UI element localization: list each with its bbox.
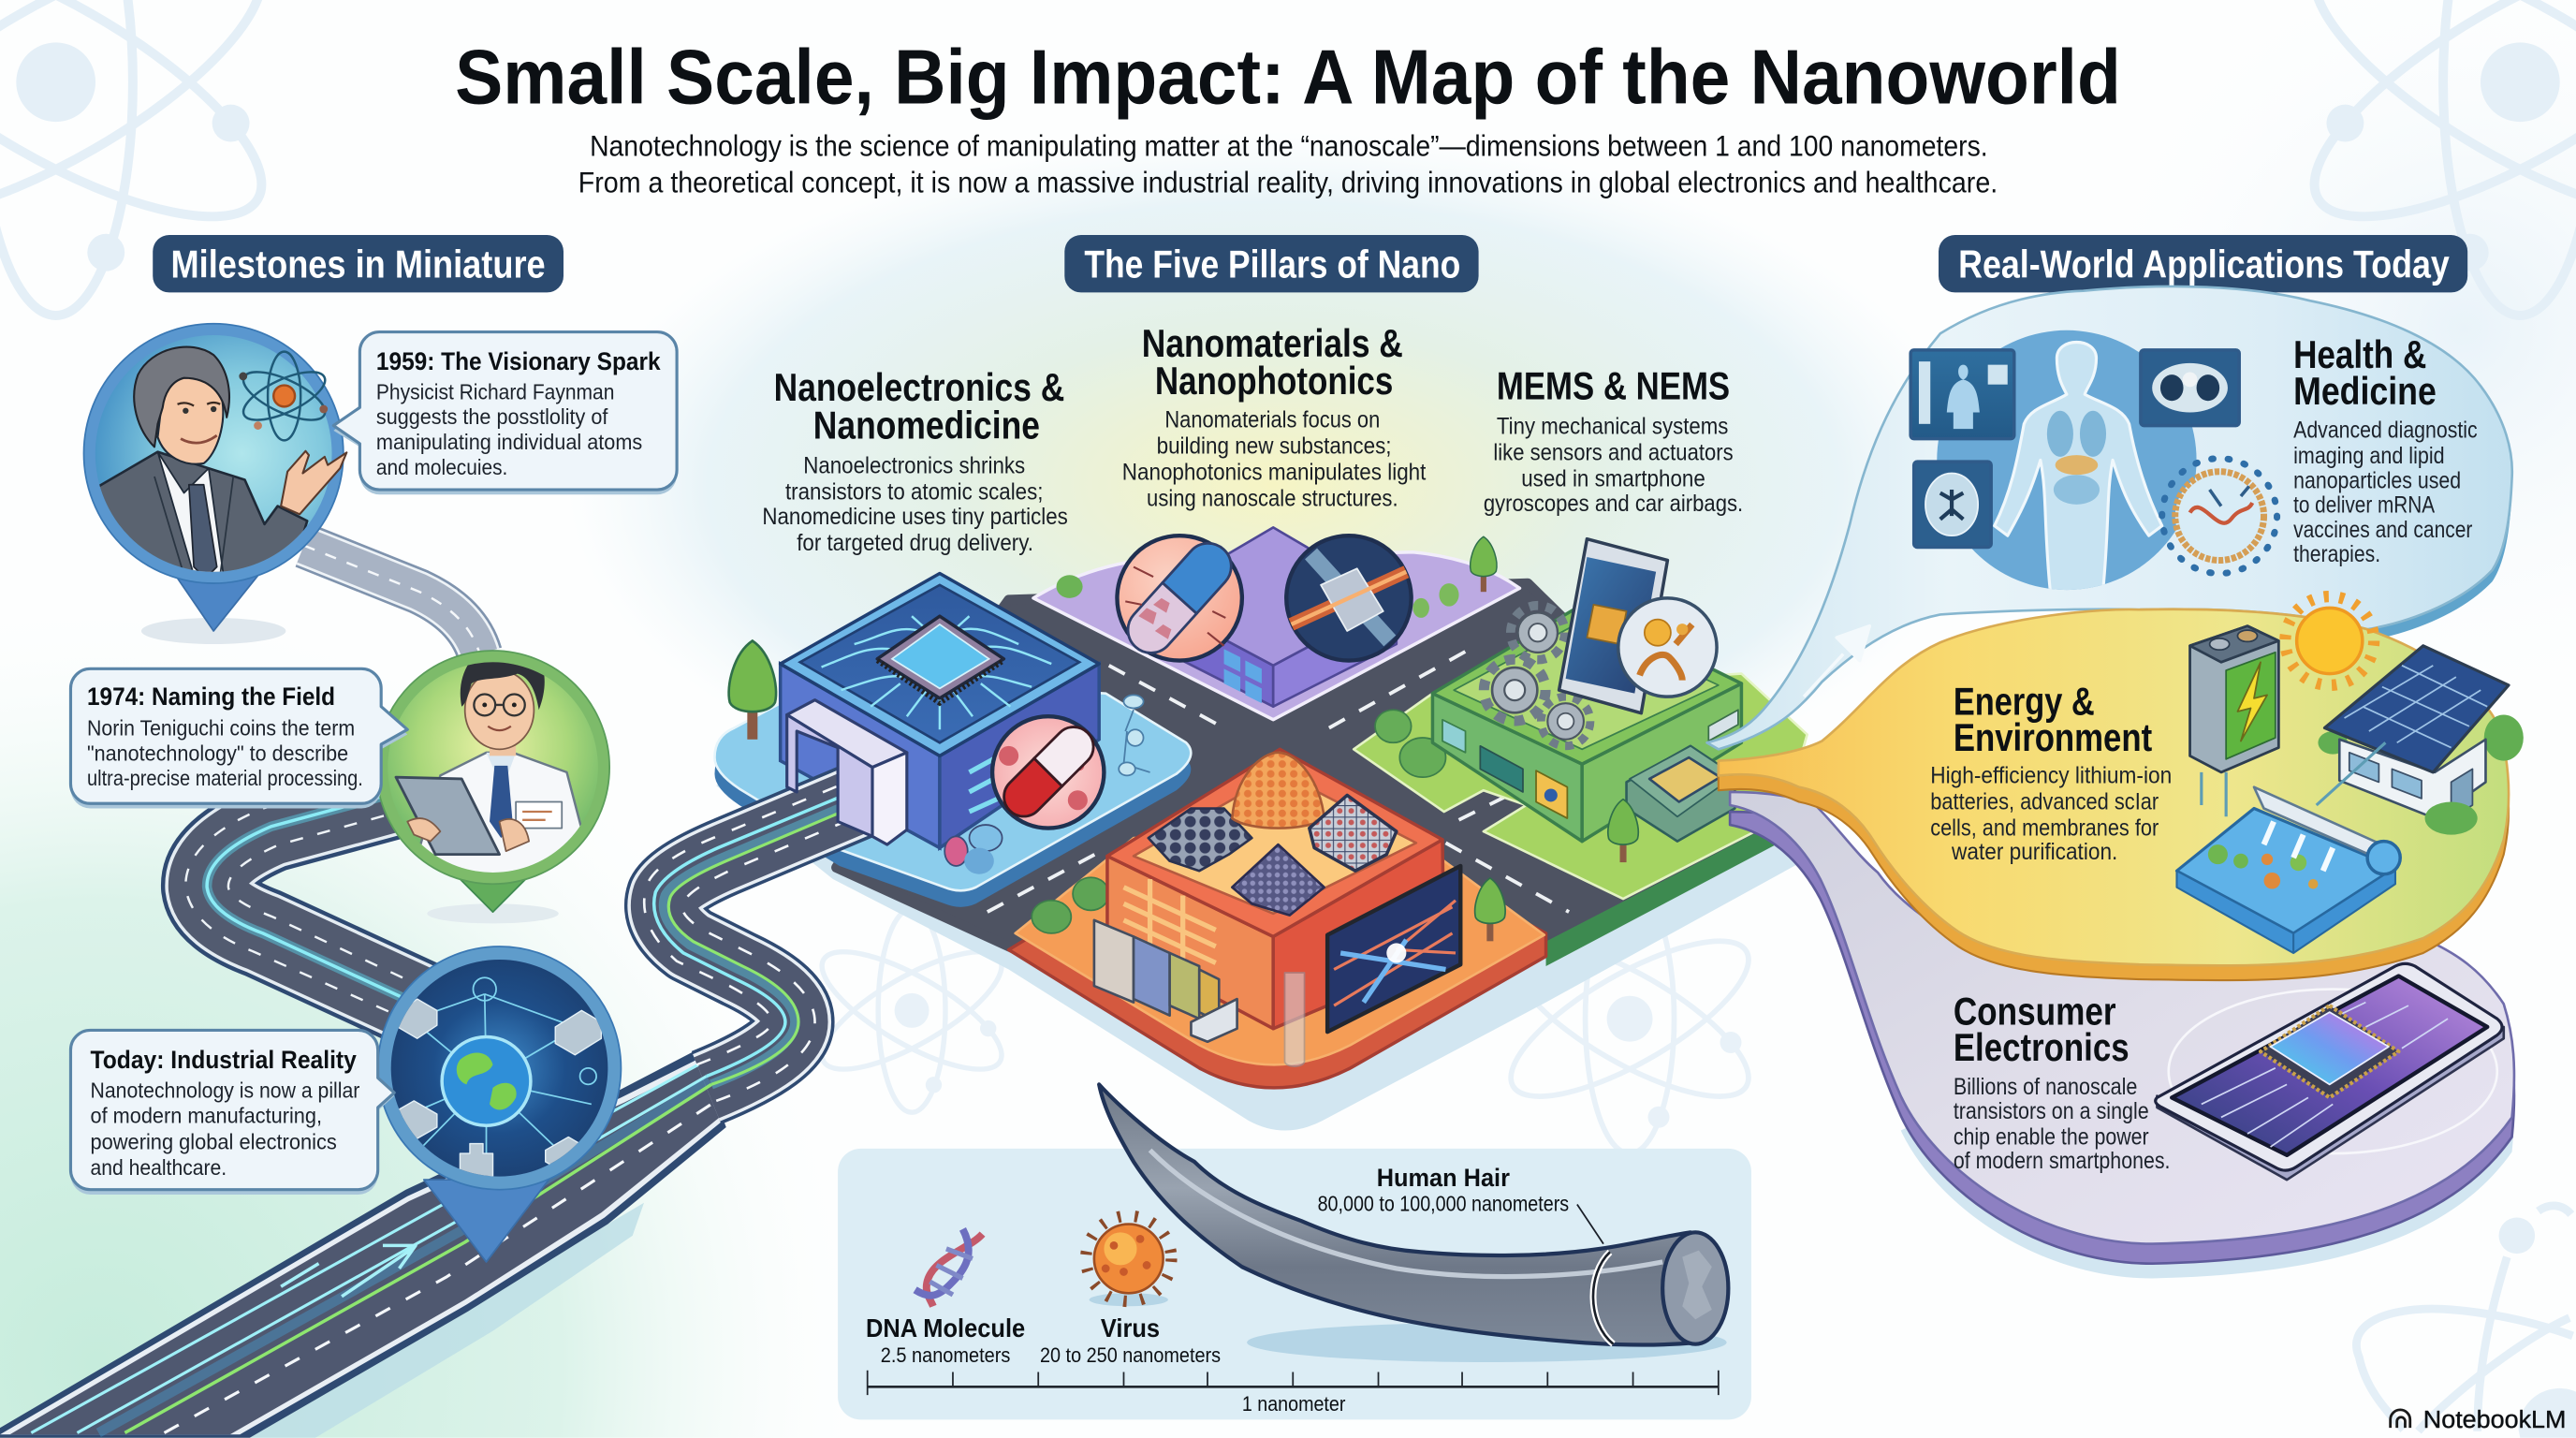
human body — [1995, 343, 2162, 592]
scale axis — [868, 1371, 1719, 1416]
road segment to pin two — [304, 546, 479, 654]
consumer electronics text: transistors on a single — [1954, 1099, 2149, 1124]
building: nanomaterials and nanophotonics — [1057, 527, 1497, 707]
plot: orange — [1009, 788, 1546, 1088]
roadway — [0, 286, 2566, 1438]
section heading: pillars: The Five Pillars of Nano — [1084, 242, 1460, 286]
consumer electronics text: Consumer — [1954, 989, 2116, 1033]
milestone pin: today — [378, 946, 621, 1262]
plot: green — [1354, 674, 1808, 966]
dome sample — [1232, 753, 1325, 829]
phone — [1559, 539, 1667, 713]
milestone card: today: powering global electronics — [91, 1130, 337, 1154]
bushes and tree — [1057, 536, 1497, 618]
pillar text: mems: Tiny mechanical systems — [1497, 414, 1728, 439]
virus label: 20 to 250 nanometers — [1040, 1343, 1221, 1367]
human hair label: 80,000 to 100,000 nanometers — [1318, 1192, 1569, 1216]
human hair label: Human Hair — [1377, 1163, 1510, 1192]
consumer electronics text — [1954, 989, 2170, 1174]
human hair label — [1318, 1163, 1569, 1216]
lipid nanoparticle — [2162, 459, 2277, 574]
milestone pin: 1974 — [376, 640, 609, 923]
pillar text: mems: gyroscopes and car airbags. — [1484, 492, 1743, 517]
energy text: batteries, advanced scIar — [1930, 789, 2159, 814]
milestone card: 1959: suggests the posstlolity of — [376, 404, 608, 429]
airbag icon — [1618, 598, 1717, 697]
application: consumer electronics — [1730, 792, 2514, 1278]
health text: imaging and lipid — [2293, 444, 2445, 469]
hand — [281, 451, 346, 514]
gate frame — [787, 700, 907, 844]
NotebookLM logo: NotebookLM — [2423, 1405, 2566, 1433]
main road to the pillars — [0, 772, 884, 1438]
energy text: Energy & — [1954, 679, 2095, 723]
gears — [1484, 606, 1590, 746]
scale panel — [838, 1084, 1751, 1419]
sensor box — [1627, 746, 1734, 842]
human hair — [1099, 1084, 1728, 1362]
floating atom — [237, 352, 331, 440]
tree front — [1608, 800, 1638, 862]
health text: Medicine — [2293, 369, 2437, 413]
water membrane — [2177, 742, 2400, 953]
milestone card: 1959: and molecuies. — [376, 455, 507, 479]
plot: blue — [714, 690, 1191, 907]
pillar text: mems — [1484, 363, 1743, 517]
health illustrations — [1910, 330, 2277, 592]
DNA label: 2.5 nanometers — [881, 1343, 1010, 1367]
pillar text: nanoelectronics — [762, 365, 1068, 556]
subtitle — [578, 129, 1998, 198]
milestone card: today: and healthcare. — [91, 1155, 227, 1180]
section heading: applications: Real-World Applications Today — [1958, 242, 2450, 286]
scan one — [1910, 350, 2014, 439]
subtitle: Nanotechnology is the science of manipulating matter at the “nanoscale”—dimensions between 1 and 100 nanometers. — [590, 129, 1988, 163]
battery — [2190, 626, 2278, 772]
health text — [2293, 332, 2478, 567]
sun — [2285, 596, 2374, 685]
section heading: applications — [1939, 235, 2467, 292]
pillar text: nanomaterials — [1122, 321, 1427, 512]
application: health and medicine — [1707, 286, 2512, 749]
milestone card: today: of modern manufacturing, — [91, 1104, 322, 1128]
plot: purple — [1033, 552, 1519, 720]
section heading: milestones: Milestones in Miniature — [171, 242, 546, 286]
house and solar panel — [2318, 646, 2524, 835]
consumer electronics text: chip enable the power — [1954, 1124, 2149, 1150]
chip — [2261, 1005, 2398, 1097]
section heading: pillars — [1064, 235, 1479, 292]
health text: Health & — [2293, 332, 2426, 376]
icon: virus — [1086, 1216, 1171, 1306]
portrait: scientist — [411, 640, 594, 879]
laser screen — [1327, 866, 1460, 1032]
pillar text: nanomaterials: Nanomaterials & — [1142, 321, 1403, 365]
milestone card: 1974 — [70, 668, 407, 809]
scan three — [1914, 462, 1991, 547]
isometric board base — [716, 583, 1815, 1131]
consumer electronics text: Billions of nanoscale — [1954, 1075, 2137, 1100]
milestone pin: 1959 — [84, 324, 346, 644]
DNA label: DNA Molecule — [866, 1313, 1025, 1343]
pill lens — [992, 716, 1104, 829]
health text: nanoparticles used — [2293, 468, 2461, 493]
energy text: High-efficiency lithium-ion — [1930, 763, 2172, 788]
milestone card: 1974: ultra-precise material processing. — [87, 766, 363, 790]
consumer electronics text: of modern smartphones. — [1954, 1149, 2170, 1174]
section heading: milestones — [153, 235, 564, 292]
consumer electronics text: Electronics — [1954, 1025, 2130, 1069]
building: materials and lasers — [1032, 749, 1505, 1066]
nanobot — [1119, 695, 1150, 775]
pillar text: mems: like sensors and actuators — [1493, 440, 1734, 465]
milestone card: today — [70, 1030, 394, 1195]
pillar text: nanomaterials: Nanophotonics manipulates light — [1122, 460, 1427, 485]
pillar text: nanomaterials: Nanomaterials focus on — [1164, 407, 1380, 433]
milestone card: 1959: manipulating individual atoms — [376, 430, 642, 454]
energy text — [1930, 679, 2172, 865]
energy illustrations — [2177, 596, 2524, 953]
pillar text: nanomaterials: using nanoscale structures. — [1147, 487, 1398, 512]
health text: to deliver mRNA — [2293, 493, 2436, 519]
application: energy and environment — [1719, 609, 2509, 980]
nano cluster — [944, 825, 1003, 874]
virus label: Virus — [1101, 1313, 1160, 1343]
consumer electronics phone illustration — [2156, 963, 2504, 1180]
health arrow — [1804, 626, 1869, 697]
tablet — [396, 777, 529, 855]
milestone card: 1974: 1974: Naming the Field — [87, 682, 335, 711]
pillar text: nanoelectronics: transistors to atomic scales; — [785, 480, 1043, 506]
milestone card: today: Nanotechnology is now a pillar — [91, 1078, 360, 1102]
milestone card: 1959: 1959: The Visionary Spark — [376, 346, 661, 375]
building: MEMS and NEMS — [1375, 539, 1741, 862]
energy text: Environment — [1954, 715, 2152, 759]
particle sample — [1232, 844, 1325, 916]
graphene sheet — [1149, 809, 1251, 871]
title: Small Scale, Big Impact: A Map of the Nanoworld — [455, 35, 2121, 121]
capsule lens — [1117, 534, 1242, 662]
scan two — [2141, 350, 2239, 426]
subtitle: From a theoretical concept, it is now a massive industrial reality, driving innovations in global electronics and healthcare. — [578, 165, 1998, 198]
health text: vaccines and cancer — [2293, 518, 2472, 543]
tree left — [729, 640, 776, 740]
pillar text: mems: used in smartphone — [1521, 467, 1705, 492]
mesh sample — [1310, 795, 1397, 871]
energy text: water purification. — [1951, 840, 2117, 865]
pillar text: nanoelectronics: Nanoelectronics & — [774, 365, 1064, 409]
pillar text: nanoelectronics: Nanomedicine uses tiny particles — [762, 505, 1068, 530]
milestone card: 1959: Physicist Richard Faynman — [376, 379, 614, 404]
icon: DNA — [915, 1229, 983, 1306]
pillar text: nanoelectronics: for targeted drug delivery. — [797, 531, 1033, 556]
road arrow — [281, 1245, 416, 1297]
scale axis: 1 nanometer — [1242, 1392, 1345, 1416]
energy text: cells, and membranes for — [1930, 815, 2159, 841]
pillar text: mems: MEMS & NEMS — [1497, 363, 1730, 407]
milestone card: 1974: Norin Teniguchi coins the term — [87, 715, 355, 740]
portrait: physicist — [98, 347, 307, 579]
pillar text: nanoelectronics: Nanoelectronics shrinks — [803, 453, 1025, 478]
pillar text: nanoelectronics: Nanomedicine — [813, 404, 1040, 448]
milestone card: 1959 — [333, 332, 677, 494]
milestone card: today: Today: Industrial Reality — [91, 1045, 357, 1074]
building: nanoelectronics — [729, 574, 1150, 874]
road segment to pin three — [185, 769, 427, 1029]
milestone card: 1974: "nanotechnology" to describe — [87, 741, 348, 766]
DNA label — [866, 1313, 1025, 1367]
pillar text: nanomaterials: Nanophotonics — [1155, 359, 1393, 403]
sample panels — [1094, 920, 1237, 1042]
virus label — [1040, 1313, 1221, 1367]
health text: Advanced diagnostic — [2293, 418, 2478, 444]
laser lens — [1286, 536, 1412, 661]
health text: therapies. — [2293, 542, 2380, 567]
network of factories and globe — [391, 977, 601, 1177]
pillar text: nanomaterials: building new substances; — [1157, 433, 1392, 459]
